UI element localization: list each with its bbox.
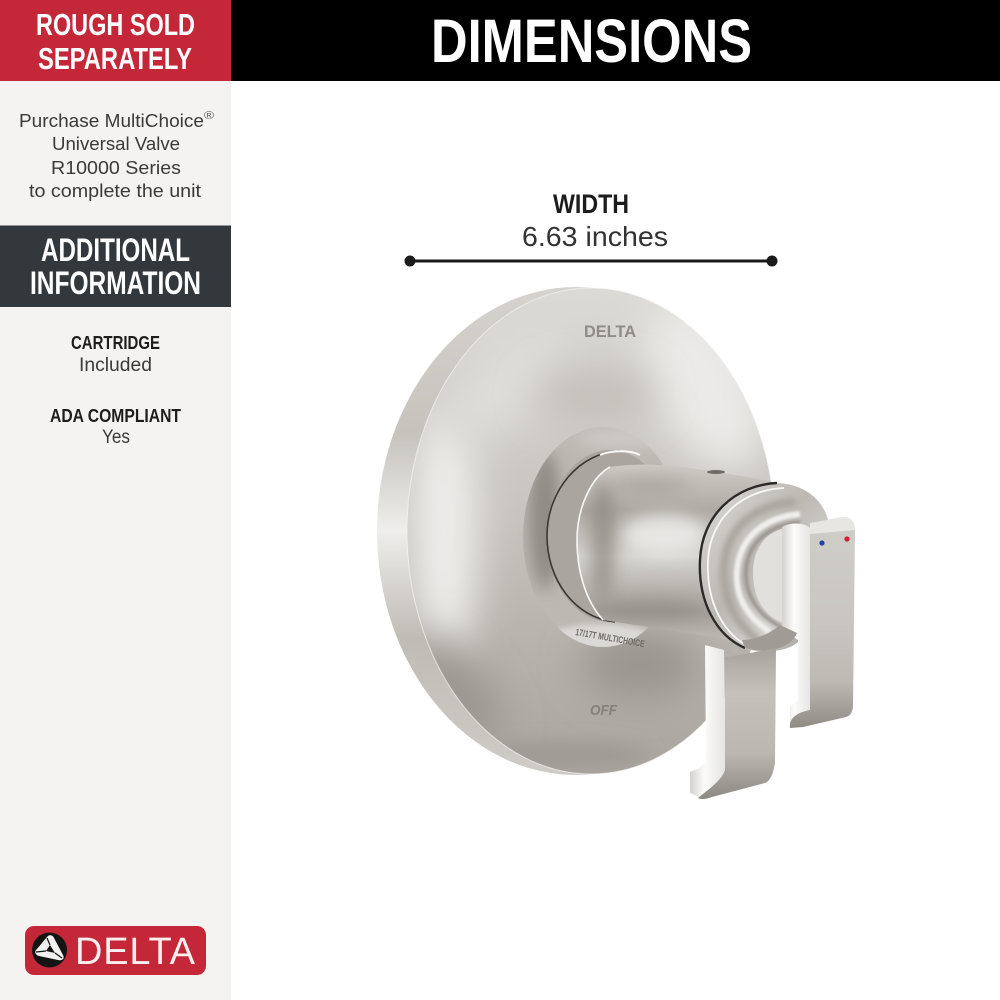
escutcheon face: [393, 282, 788, 774]
banner heading: [30, 232, 201, 301]
red banner: [0, 0, 231, 81]
text block: purchase note: [19, 110, 214, 201]
banner heading: ROUGH SOLD: [36, 7, 195, 42]
knob opening: [753, 527, 800, 627]
hub engraving: 17/17T MULTICHOICE: [574, 627, 645, 650]
indicator: hot: [844, 536, 850, 542]
knob ring: [700, 483, 828, 652]
spec: cartridge: CARTRIDGE: [71, 332, 160, 353]
label: width: WIDTH: [553, 189, 629, 219]
panel: additional information: [0, 226, 231, 307]
banner heading: SEPARATELY: [38, 41, 192, 76]
engraved brand: DELTA: [584, 322, 636, 341]
icon: delta emblem: [32, 932, 67, 968]
text block: purchase note: Universal Valve: [52, 133, 180, 154]
upper lever: polished side: [782, 524, 812, 728]
dimension line: [404, 256, 778, 266]
spec: ada compliant: [50, 405, 182, 448]
knob lower lip: [742, 625, 797, 651]
spec: cartridge: Included: [79, 355, 152, 376]
indicator: cold: [819, 540, 825, 546]
product: valve trim: [377, 282, 855, 800]
text block: purchase note: R10000 Series: [51, 157, 181, 178]
engraved off label: OFF: [590, 703, 618, 719]
panel: rough sold separately: [0, 0, 231, 81]
spec: ada compliant: Yes: [102, 427, 130, 448]
text block: purchase note: ®: [204, 110, 214, 122]
spec: cartridge: [71, 332, 160, 376]
spec: ada compliant: ADA COMPLIANT: [50, 405, 182, 426]
upper lever: [790, 517, 855, 728]
collar: [547, 450, 673, 622]
logo wordmark: DELTA: [75, 931, 196, 973]
face edge highlight: [407, 288, 775, 774]
valve body: [577, 465, 777, 648]
text block: purchase note: Purchase MultiChoice: [19, 110, 204, 131]
lower lever: [698, 648, 776, 799]
logo: delta: [25, 926, 206, 975]
hub: [523, 427, 664, 647]
lower lever: polished side: [690, 645, 726, 800]
banner heading: ADDITIONAL: [41, 232, 190, 268]
header: dimensions banner: [231, 0, 1000, 81]
dark banner: [0, 226, 231, 307]
value: width in inches: 6.63 inches: [522, 221, 668, 252]
banner heading: [36, 7, 195, 76]
panel: sidebar background: [0, 0, 231, 1000]
escutcheon rim: [377, 287, 775, 775]
title: DIMENSIONS: [431, 7, 752, 75]
logo background: [25, 926, 206, 975]
text block: purchase note: to complete the unit: [29, 180, 201, 201]
banner background: [231, 0, 1000, 81]
banner heading: INFORMATION: [30, 265, 201, 301]
set screw: [707, 470, 725, 474]
